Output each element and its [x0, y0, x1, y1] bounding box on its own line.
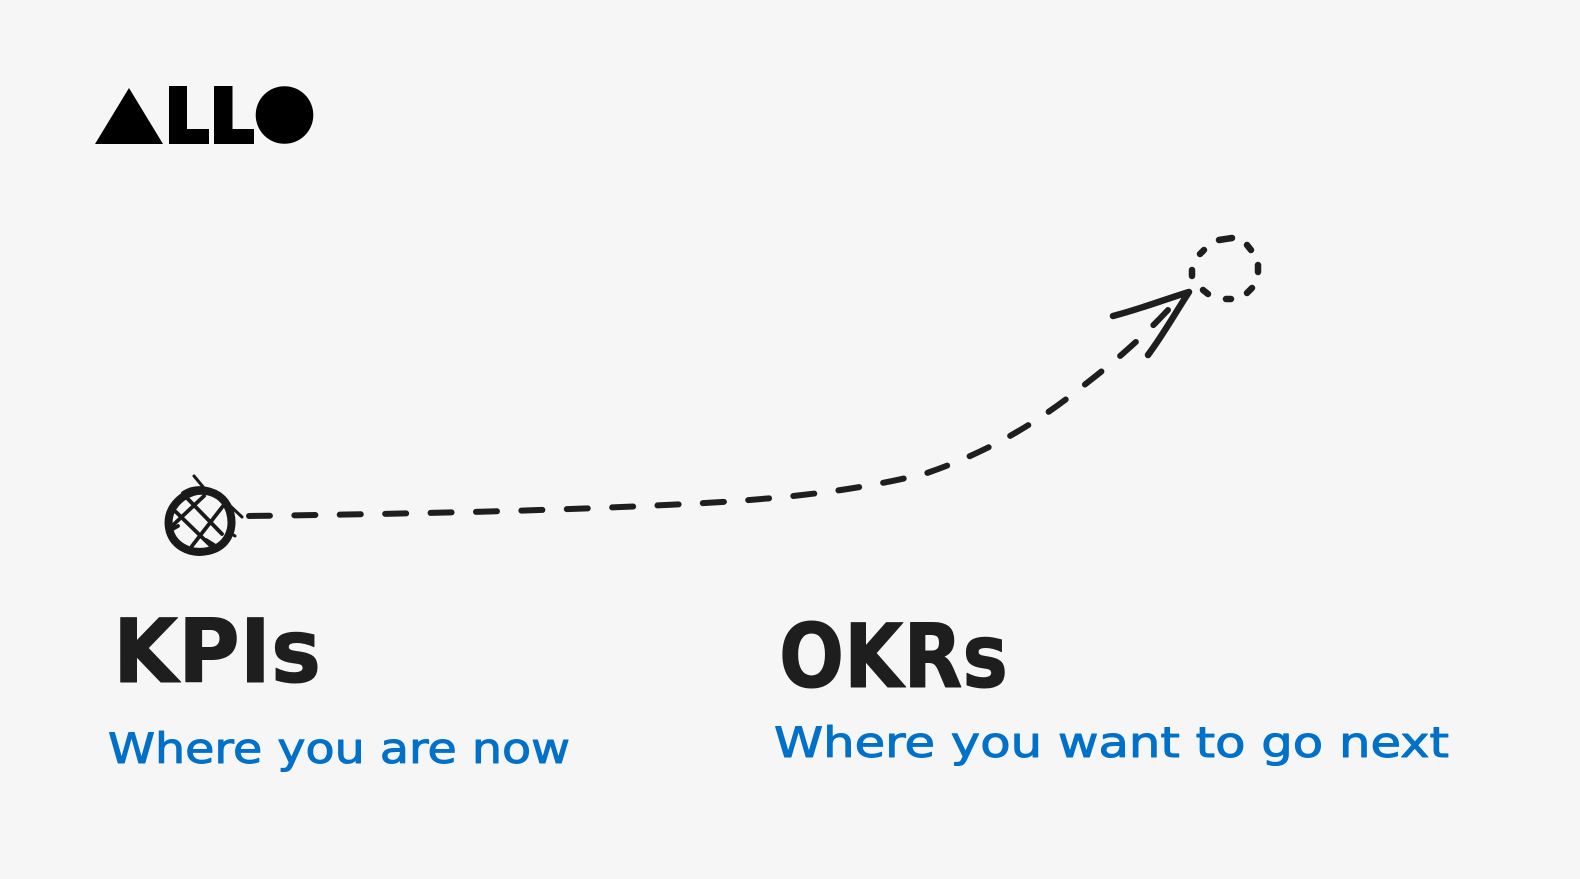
arrow head	[1113, 292, 1189, 355]
icon: hatched start circle	[169, 476, 242, 552]
subheading: where you are now: Where you are now	[108, 724, 570, 773]
icon: dotted target circle	[1192, 238, 1258, 299]
heading: KPIs: KPIs	[113, 600, 321, 703]
heading: OKRs: OKRs	[779, 605, 1008, 708]
logo: ALLO	[95, 86, 313, 144]
subheading: where you want to go next: Where you want to go next	[774, 718, 1449, 767]
dashed path arrow line	[249, 310, 1168, 516]
